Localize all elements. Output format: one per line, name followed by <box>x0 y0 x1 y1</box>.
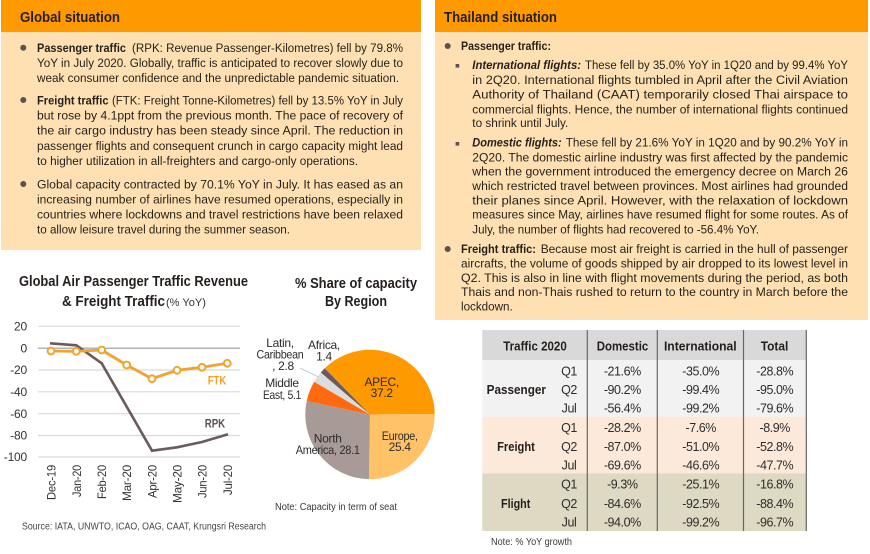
freight rows: -46.6% <box>682 459 719 473</box>
flight rows: -96.7% <box>756 516 793 530</box>
text block: domestic flights: Domestic flights: <box>472 136 562 150</box>
label: Europe <box>382 429 418 454</box>
passenger rows: Q1 <box>561 364 577 378</box>
table note: Note: % YoY growth <box>491 537 572 548</box>
x axis labels: Dec-19 <box>44 465 58 500</box>
passenger rows: -79.6% <box>756 402 793 416</box>
label: Latin, Caribbean: Caribbean <box>256 347 304 361</box>
passenger rows: -99.2% <box>682 402 719 416</box>
text block: freight traffic bullet <box>20 93 404 168</box>
flight rows: -99.2% <box>682 516 719 530</box>
text block: freight traffic bullet: passenger flights and consequent crunch in cargo capacity might lead <box>37 139 403 153</box>
x axis labels: Jan-20 <box>70 465 84 497</box>
text block: freight traffic bullet: to higher utilization in all-freighters and cargo-only operations. <box>37 154 358 168</box>
label: North America: North <box>314 432 342 446</box>
flight rows: -25.1% <box>682 478 719 492</box>
label: Europe: 25.4 <box>389 440 411 454</box>
passenger rows: -35.0% <box>682 364 719 378</box>
text block: passenger traffic bullet: (RPK: Revenue Passenger-Kilometres) fell by 79.8% <box>132 41 403 55</box>
label: Africa: 1.4 <box>316 350 333 364</box>
label: APEC <box>364 375 399 400</box>
x axis labels: Mar-20 <box>120 464 134 501</box>
text block: international flights: commercial flights. Hence, the number of international flights continued <box>472 102 848 116</box>
slice: Middle East <box>307 382 370 414</box>
flight rows: -92.5% <box>682 497 719 511</box>
text block: freight traffic: Because most air freight is carried in the hull of passenger <box>541 242 848 256</box>
flight rows: -84.6% <box>604 497 641 511</box>
text block: domestic flights: 2Q20. The domestic airline industry was first affected by the pandemic <box>472 150 848 164</box>
pie chart: share of capacity by region <box>256 276 435 513</box>
table header row: International <box>664 338 737 354</box>
y axis labels: -60 <box>10 407 28 421</box>
passenger rows: -21.6% <box>604 364 641 378</box>
text block: domestic flights <box>456 136 849 236</box>
passenger rows: -56.4% <box>604 402 641 416</box>
passenger rows: -95.0% <box>756 383 793 397</box>
text block: freight traffic bullet: the air cargo industry has been steady since April. The reduction in <box>37 124 403 138</box>
text block: freight traffic: Q2. This is also in line with flight movements during the period, as both <box>461 271 848 285</box>
x axis labels: May-20 <box>170 464 184 503</box>
text block: global capacity bullet: countries where lockdowns and travel restrictions have been relaxed <box>37 207 403 221</box>
text block: global capacity bullet: increasing number of airlines have resumed operations, especially in <box>37 192 403 206</box>
text block: passenger traffic bullet: weak consumer confidence and the unpredictable pandemic situation. <box>36 71 399 85</box>
y axis labels: -40 <box>10 385 28 399</box>
text block: domestic flights: when the government introduced the emergency decree on March 26 <box>471 165 848 179</box>
text block: passenger traffic bullet <box>20 41 403 85</box>
text block: freight traffic bullet: (FTK: Freight Tonne-Kilometres) fell by 13.5% YoY in July <box>112 93 404 107</box>
freight rows <box>482 417 807 473</box>
freight rows: Jul <box>562 459 576 473</box>
RPK label: RPK <box>205 416 225 430</box>
x axis labels: Jun-20 <box>196 465 210 498</box>
pie note: Note: Capacity in term of seat <box>275 502 397 513</box>
passenger rows: -99.4% <box>682 383 719 397</box>
pie chart title: % Share of capacity <box>295 276 417 292</box>
freight rows: -87.0% <box>604 440 641 454</box>
freight rows: -69.6% <box>604 459 641 473</box>
x axis labels: Apr-20 <box>146 465 160 498</box>
text block: international flights: International flights: <box>472 58 581 72</box>
text block: domestic flights: July, the number of flights had recovered to -56.4% YoY. <box>472 222 759 236</box>
freight rows: -28.2% <box>604 421 641 435</box>
slice: Africa <box>321 368 370 414</box>
freight rows: -8.9% <box>759 421 790 435</box>
freight rows: -7.6% <box>685 421 716 435</box>
y axis labels <box>4 320 28 464</box>
flight rows: Q2 <box>561 497 577 511</box>
label: Latin, Caribbean: , 2.8 <box>272 359 295 373</box>
text block: freight traffic: lockdown. <box>461 299 513 313</box>
text block: freight traffic bullet: Freight traffic <box>37 93 109 107</box>
source note: Source: IATA, UNWTO, ICAO, OAG, CAAT, Krungsri Research <box>22 522 266 532</box>
text block: freight traffic bullet: but rose by 4.1ppt from the previous month. The pace of recovery of <box>37 108 404 122</box>
text block: domestic flights: measures since May, airlines have resumed flight for some routes. As of <box>472 208 849 222</box>
heading: thailand situation <box>435 0 868 32</box>
label: Latin, Caribbean: Latin, <box>266 336 294 350</box>
text block: freight traffic <box>445 242 848 313</box>
RPK line <box>50 343 228 451</box>
text block: freight traffic: aircrafts, the volume of goods shipped by air dropped to its lowest level in <box>461 256 848 270</box>
line chart: global air passenger traffic and freight traffic <box>4 274 248 503</box>
text block: passenger traffic bullet: YoY in July 2020. Globally, traffic is anticipated to recover slowly due to <box>37 56 403 70</box>
chart title <box>19 274 248 310</box>
text block: international flights: in 2Q20. International flights tumbled in April after the Civil Aviation <box>472 73 848 87</box>
label: North America: America, 28.1 <box>296 443 360 457</box>
x axis labels <box>44 464 235 503</box>
flight rows: -94.0% <box>604 516 641 530</box>
freight rows: Q2 <box>561 440 577 454</box>
x axis labels: Jul-20 <box>221 464 235 495</box>
label: APEC: 37.2 <box>371 386 393 400</box>
pie chart title: By Region <box>325 294 387 310</box>
flight rows: Jul <box>562 516 576 530</box>
y axis labels: 20 <box>14 320 28 334</box>
freight rows: -51.0% <box>682 440 719 454</box>
text block: global capacity bullet <box>20 177 403 236</box>
freight rows: Freight <box>497 439 535 454</box>
label: Latin, Caribbean <box>256 336 304 373</box>
label: Africa: Africa, <box>308 338 340 352</box>
label: Europe: Europe, <box>382 429 418 443</box>
label: APEC: APEC, <box>364 375 399 389</box>
text block: passenger traffic heading: Passenger traffic: <box>461 39 551 53</box>
chart title: (% YoY) <box>166 297 206 309</box>
label: Middle East: Middle <box>265 376 299 390</box>
table header row: Domestic <box>597 338 648 354</box>
text block: international flights: to shrink until July. <box>472 116 568 130</box>
text block: global capacity bullet: Global capacity contracted by 70.1% YoY in July. It has eased as an <box>37 177 403 191</box>
flight rows <box>482 473 807 531</box>
label: North America <box>296 432 360 457</box>
x axis labels: Feb-20 <box>95 465 109 499</box>
passenger rows: Q2 <box>561 383 577 397</box>
table: traffic 2020 <box>482 330 807 531</box>
text block: international flights <box>456 58 848 130</box>
passenger rows: -90.2% <box>604 383 641 397</box>
text block: freight traffic: Thais and non-Thais rushed to return to the country in March before the <box>461 285 848 299</box>
flight rows: Q1 <box>561 478 577 492</box>
table header row: Traffic 2020 <box>503 338 567 354</box>
slice: Europe <box>369 414 435 479</box>
text block: passenger traffic bullet: Passenger traffic <box>37 41 126 55</box>
text block: international flights: These fell by 35.0% YoY in 1Q20 and by 99.4% YoY <box>585 58 848 72</box>
table header row: Total <box>761 338 788 354</box>
flight rows: -88.4% <box>756 497 793 511</box>
text block: global capacity bullet: to allow leisure travel during the summer season. <box>37 222 290 236</box>
table header row <box>482 330 807 360</box>
heading: thailand situation: Thailand situation <box>444 9 557 26</box>
slice: North America <box>305 401 370 479</box>
y axis labels: -100 <box>4 450 28 464</box>
label: Middle East: East, 5.1 <box>263 388 302 402</box>
label: Middle East <box>263 376 302 402</box>
label: Africa <box>308 338 340 364</box>
slice: Latin, Caribbean <box>314 372 370 414</box>
freight rows: -47.7% <box>756 459 793 473</box>
heading: global situation <box>1 0 421 32</box>
text block: freight traffic: Freight traffic: <box>461 242 536 256</box>
slice: APEC <box>325 350 435 414</box>
text block: domestic flights: These fell by 21.6% YoY in 1Q20 and by 90.2% YoY in <box>566 136 848 150</box>
chart title: & Freight Traffic <box>62 294 165 310</box>
y axis labels: -80 <box>10 429 28 443</box>
freight rows: Q1 <box>561 421 577 435</box>
passenger rows: Jul <box>562 402 576 416</box>
pie chart title <box>295 276 417 310</box>
heading: global situation: Global situation <box>20 9 120 26</box>
FTK label: FTK <box>208 374 226 388</box>
passenger rows: Passenger <box>487 382 546 397</box>
flight rows: -9.3% <box>607 478 638 492</box>
text block: domestic flights: which restricted travel between provinces. Most airlines had grounded <box>471 179 848 193</box>
FTK line with markers <box>48 347 231 382</box>
flight rows: Flight <box>501 496 531 511</box>
y axis labels: 0 <box>21 341 28 355</box>
flight rows: -16.8% <box>756 478 793 492</box>
panel: global situation <box>1 0 421 250</box>
panel: thailand situation <box>435 0 868 320</box>
freight rows: -52.8% <box>756 440 793 454</box>
passenger rows <box>482 360 807 417</box>
chart title: Global Air Passenger Traffic Revenue <box>19 274 248 290</box>
text block: international flights: Authority of Thailand (CAAT) temporarily closed Thai airspace to <box>472 88 848 102</box>
text block: domestic flights: their planes since April. However, with the relaxation of lockdown <box>472 193 848 207</box>
y axis labels: -20 <box>10 363 28 377</box>
passenger rows: -28.8% <box>756 364 793 378</box>
